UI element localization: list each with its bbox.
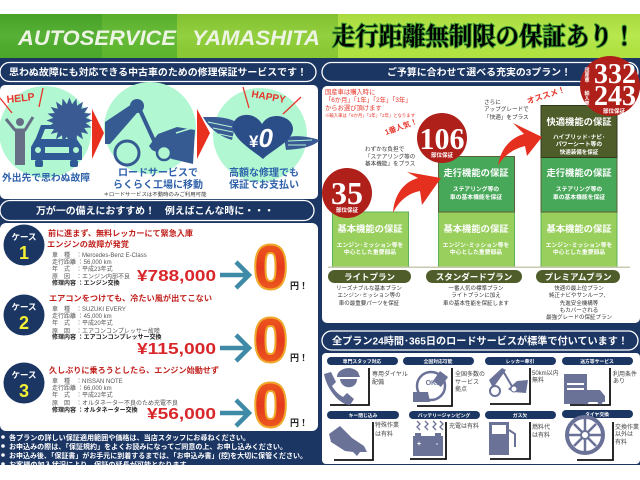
premium plan column: ステアリング等の [556, 185, 602, 193]
service: key: キー閉じ込み [349, 412, 378, 419]
case 1 [4, 224, 308, 301]
service: tire: タイヤ交換 [585, 411, 609, 418]
case 2: 2 [19, 313, 29, 333]
standard plan label: 一番人気の標準プラン [448, 284, 504, 292]
baseline [328, 266, 630, 268]
case 2: 0 [254, 307, 287, 374]
case 3: ケース [11, 370, 37, 380]
circle 332 243 parts: 産 [584, 72, 590, 79]
service: tow: レッカー牽引 [506, 358, 535, 365]
heading pill: road service: 全プラン24時間･365日のロードサービスが標準で付いています！ [332, 334, 628, 348]
circle 35 parts: 35 [331, 175, 363, 211]
service: battery: 充電は有料 [449, 422, 479, 430]
circle 106 parts [417, 113, 467, 163]
premium plan label [536, 270, 620, 321]
domestic note [325, 87, 415, 119]
case 2 [4, 293, 308, 374]
premium plan column [541, 106, 617, 267]
case 2: 走行距離 ：45,000 km [52, 312, 112, 320]
service: battery: + [417, 441, 421, 448]
case 1: 走行距離 ：56,000 km [52, 258, 112, 266]
light plan label: ライトプラン [344, 272, 395, 282]
circle 332 243 parts: 車 [584, 77, 590, 84]
heading pill: three plans: ご予算に合わせて選べる充実の3プラン！ [387, 66, 571, 78]
service: battery: バッテリージャンピング [418, 412, 470, 419]
upgrade arrow 1 [393, 172, 441, 213]
arrow 1 [92, 109, 104, 159]
brand name second word: YAMASHITA [192, 27, 320, 50]
service: fuel [485, 411, 556, 459]
standard upgrade note: 基本機能」をプラス [365, 160, 416, 168]
case 1: 修理内容 ：エンジン交換 [52, 279, 120, 287]
case 3: ¥56,000 [147, 406, 216, 423]
standard plan label: ライトプランに加え [451, 291, 501, 299]
light plan label [328, 270, 411, 307]
case 1: 前に進まず、無料レッカーにて緊急入庫 [48, 228, 193, 238]
service: tow: 50km以内 [532, 369, 559, 377]
step 2 road service [104, 82, 206, 198]
light plan column [332, 212, 408, 267]
heading pill: examples [0, 200, 314, 220]
premium plan column: 基本機能の保証 [546, 223, 612, 234]
premium plan column: 中心とした重要部品 [553, 248, 605, 256]
case 2: 円！ [290, 353, 308, 363]
service: staff: 専門スタッフ対応 [343, 358, 381, 365]
service: tire: 以外は [615, 430, 633, 438]
premium plan column: パワーシート等の [556, 140, 602, 148]
popular label: 1番人気！ [383, 116, 419, 137]
light plan label: 車の最重要パーツを保証 [339, 299, 400, 307]
upgrade arrow 2 [498, 123, 542, 166]
case 2: 原 因 ：エアコンコンプレッサー故障 [52, 327, 160, 335]
standard upgrade note: 「ステアリング等の [365, 152, 416, 160]
premium plan label: プレミアムプラン [545, 272, 611, 282]
premium plan column: 快適装備を保証 [560, 148, 599, 156]
heading pill: repair guarantee [0, 62, 316, 82]
heading pill: three plans [322, 62, 638, 82]
light plan label: エンジン･ミッション等の [337, 291, 401, 299]
service: transport [562, 357, 637, 405]
domestic note: からお選び頂けます [325, 103, 382, 112]
step 1 help [0, 86, 92, 184]
case 2: 年 式 ：平成20年式 [52, 319, 113, 327]
case 2: ¥115,000 [137, 341, 216, 358]
domestic note: 国産車は購入時に [325, 87, 375, 96]
case 3: 3 [19, 381, 29, 401]
footnotes: お申込みの際は、「保証規約」をよくお読みになってご同意の上、お申し込みください。 [9, 442, 287, 451]
case 2: ケース [11, 302, 37, 312]
service: staff [324, 357, 408, 405]
case 3: 年 式 ：平成22年式 [52, 391, 113, 399]
premium plan column: 走行機能の保証 [546, 167, 612, 178]
standard upgrade note [365, 145, 416, 168]
service: nationwide: 全国多数の [455, 370, 485, 378]
standard plan label: 車の基本性能を保証します [443, 299, 509, 307]
circle 332 243 parts: 332 [594, 59, 636, 90]
service: transport: あり [613, 378, 625, 385]
premium upgrade note [484, 99, 529, 121]
standard plan column: 中心とした重要部品 [450, 248, 502, 256]
panel: plans [322, 56, 640, 323]
premium plan label: 最強グレードの保証プラン [546, 313, 612, 321]
step 1 help: HELP [6, 91, 35, 106]
case 1: ¥788,000 [137, 268, 216, 285]
circle 332 243 parts: 輸 [584, 90, 590, 97]
premium plan label: もカバーされる [560, 307, 598, 314]
standard plan label: スタンダードプラン [436, 272, 512, 282]
case 3: 円！ [290, 418, 308, 428]
case 2: 車 種 ：SUZUKI EVERY [52, 305, 126, 313]
service: staff: 配備 [372, 378, 384, 386]
service: nationwide: サービス [455, 378, 479, 386]
circle 106 parts: 106 [420, 121, 464, 156]
standard plan column: エンジン･ミッション等を [443, 241, 510, 249]
service: key: 特殊作業 [375, 421, 399, 429]
premium upgrade note: さらに [484, 99, 501, 106]
service: nationwide: 全国対応可能 [424, 358, 453, 365]
premium upgrade note: 「快適」をプラス [484, 113, 529, 121]
panel: road services [322, 353, 640, 464]
circle 332 243 parts: 車 [584, 100, 590, 107]
circle 332 243 parts: 国 [584, 67, 590, 74]
case 1: エンジンの故障が発覚 [47, 239, 129, 249]
footnotes: お客様の加入状況により、保証の延長が可能となります。 [9, 460, 193, 469]
premium plan label: 純正ナビやサンルーフ、 [549, 291, 609, 299]
case 1: 0 [254, 234, 287, 301]
service: tow: 無料 [532, 376, 544, 384]
case 1: 車 種 ：Mercedes-Benz E-Class [52, 251, 147, 259]
recommend label: オススメ！ [526, 85, 567, 106]
case 3: 久しぶりに乗ろうとしたら、エンジン始動せず [49, 365, 219, 375]
standard plan column: 基本機能の保証 [443, 223, 509, 234]
step 2 road service: ＊ロードサービスは不動時のみご利用可能 [104, 191, 206, 198]
service: transport: 利用条件 [613, 370, 637, 378]
standard plan column: ステアリング等の [453, 185, 499, 193]
service: tire: 交換作業 [615, 423, 639, 431]
panel: three steps [0, 82, 320, 199]
premium plan column: エンジン･ミッション等を [546, 241, 613, 249]
service: tire [562, 410, 639, 460]
step 1 help: 外出先で思わぬ故障 [2, 171, 90, 184]
case 3: 原 因 ：オルタネーター不良のため充電不良 [52, 399, 178, 407]
step 3 happy: 保証でお支払い [229, 178, 299, 191]
premium plan label: 先進安全機構等 [560, 299, 599, 307]
header banner [0, 14, 640, 58]
light plan column: 基本機能の保証 [337, 223, 403, 234]
case 2: エアコンをつけても、冷たい風が出てこない [49, 293, 212, 303]
case 3: 走行距離 ：66,000 km [52, 384, 112, 392]
case 3: 車 種 ：NISSAN NOTE [52, 377, 123, 385]
case 3: 修理内容 ：オルタネーター交換 [52, 406, 138, 414]
case 3: 0 [254, 372, 287, 439]
panel: cases [0, 223, 318, 439]
step 3 happy: 高額な修理でも [229, 166, 299, 179]
brand name: AUTOSERVICE [17, 27, 177, 50]
arrow 2 [197, 109, 210, 159]
standard plan column: 走行機能の保証 [443, 167, 509, 178]
service: key: は有料 [375, 430, 393, 438]
circle 106 parts: 部位保証 [431, 151, 453, 159]
standard upgrade note: わずかな負担で [365, 145, 405, 153]
step 3 happy: HAPPY [250, 89, 287, 106]
case 1: 円！ [290, 281, 308, 291]
service: key [327, 411, 399, 460]
service: fuel: 燃料代 [532, 423, 550, 431]
service: tow [485, 357, 559, 404]
premium plan column: 快適機能の保証 [546, 116, 612, 127]
service: nationwide [403, 357, 485, 406]
heading pill: road service [322, 331, 638, 350]
heading pill: examples: 万が一の備えにおすすめ！ 例えばこんな時に・・・ [36, 205, 274, 217]
circle 35 parts [322, 168, 372, 218]
service: battery [409, 411, 480, 459]
white page bottom [0, 465, 640, 480]
light plan column: エンジン･ミッション等を [337, 241, 404, 249]
premium plan column: 車の基本機能を保証 [553, 193, 605, 201]
premium plan label: 快適の最上位プラン [554, 284, 604, 292]
service: battery: - [436, 441, 439, 448]
service: fuel: ガス欠 [513, 412, 527, 419]
service: tire: 有料 [615, 438, 627, 446]
case 1: 年 式 ：平成23年式 [52, 265, 113, 273]
step 3 happy [203, 87, 320, 191]
step 3 happy: ¥0 [249, 123, 274, 153]
service: staff: 専用ダイヤル [372, 370, 408, 378]
case 1: ケース [11, 232, 37, 242]
service: nationwide: OK! [426, 380, 438, 387]
circle 35 parts: 部位保証 [336, 206, 358, 214]
standard plan label [426, 270, 522, 307]
circle 332 243 parts [580, 56, 640, 116]
service: nationwide: 拠点 [455, 385, 467, 393]
light plan label: リーズナブルな基本プラン [336, 284, 402, 292]
standard plan column [438, 156, 514, 267]
footnotes [1, 433, 307, 469]
circle 332 243 parts: 入 [584, 96, 590, 102]
domestic note: ※輸入車は「6か月」「1年」「2年」となります [325, 112, 415, 119]
service: transport: 送方等サービス [580, 358, 614, 365]
case 1: 原 因 ：エンジン内部不良 [52, 272, 130, 280]
case 1: 1 [19, 243, 29, 263]
light plan column: 中心とした重要部品 [344, 248, 396, 256]
domestic note: 「6か月」「1年」「2年」「3年」 [325, 95, 411, 104]
premium plan column: ハイブリッド･ナビ･ [553, 133, 605, 141]
premium upgrade note: アップグレードで [484, 105, 529, 113]
step 2 road service: らくらく工場に移動 [113, 178, 203, 191]
case 2: 修理内容 ：エアコンコンプレッサー交換 [52, 333, 162, 341]
step 2 road service: ロードサービスで [118, 166, 198, 179]
circle 332 243 parts: 部位保証 [603, 107, 625, 115]
circle 332 243 parts: 243 [594, 81, 636, 112]
standard plan column: 車の基本機能を保証 [450, 193, 502, 201]
heading pill: repair guarantee: 思わぬ故障にも対応できる中古車のための修理保証サービスです！ [9, 66, 307, 78]
service: fuel: は有料 [532, 431, 550, 439]
footnotes: お申込み後、「保証書」がお手元に到着するまでは、「お申込み書」(控)を大切に保管ください。 [9, 451, 307, 460]
case 3 [4, 362, 308, 439]
footnotes: 各プランの詳しい保証適用範囲や価格は、当店スタッフにお尋ねください。 [9, 433, 250, 442]
